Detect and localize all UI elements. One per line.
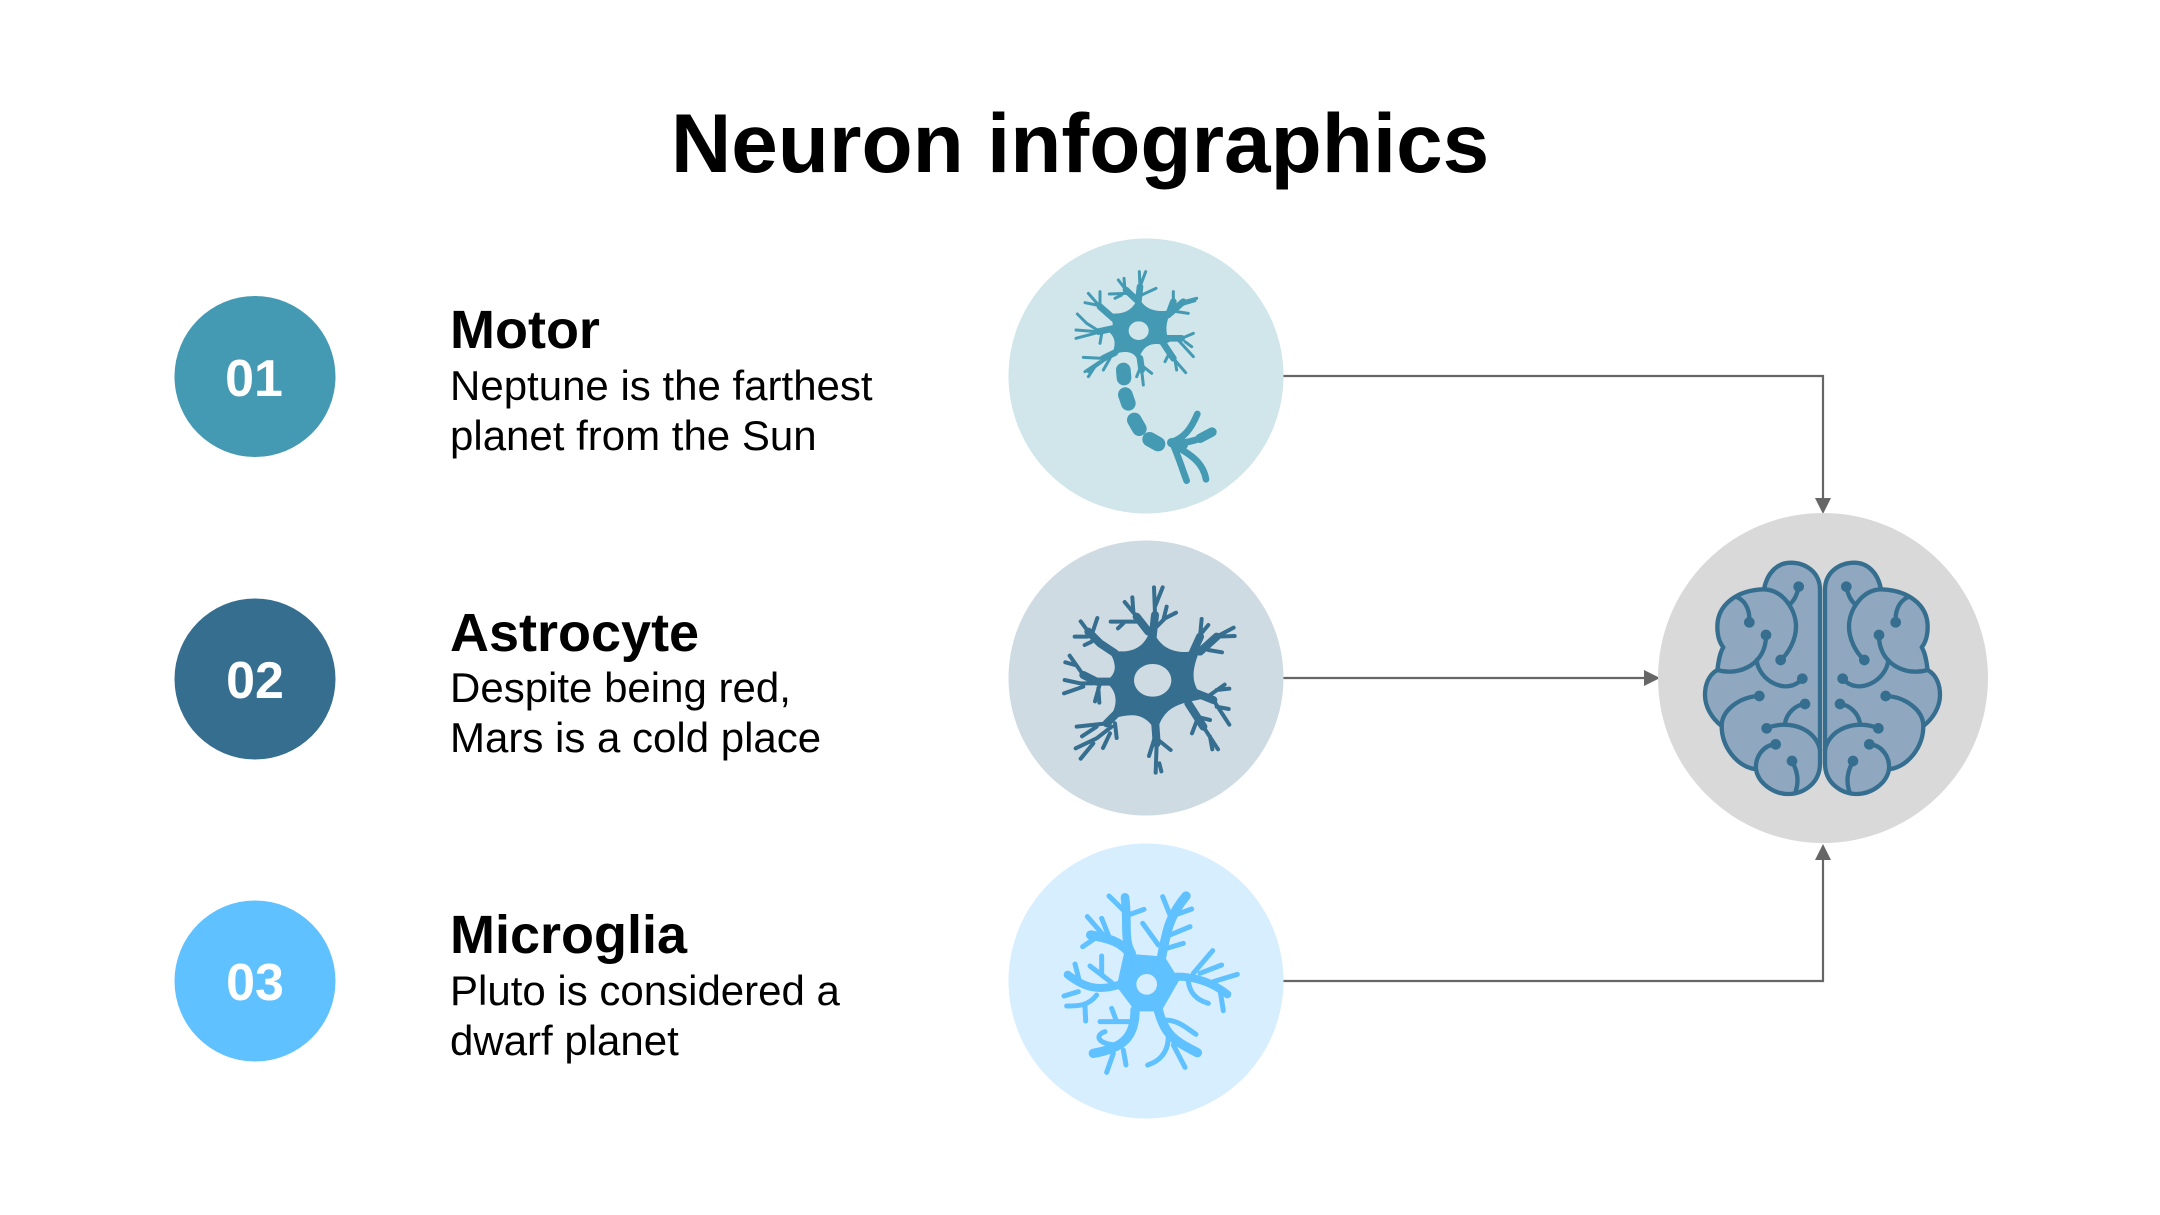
- number badge 01: 01: [225, 350, 283, 408]
- text block: Astrocyte: Despite being red,: [450, 664, 791, 711]
- icon: motor neuron: [1008, 238, 1284, 514]
- icon: astrocyte: [1008, 540, 1284, 816]
- number badge 02: [174, 598, 336, 760]
- brain left hemisphere: [1705, 563, 1820, 794]
- number badge 03: 03: [226, 954, 284, 1012]
- icon: microglia: [1008, 844, 1284, 1118]
- brain right hemisphere: [1825, 563, 1940, 794]
- text block: Microglia: [450, 905, 841, 1064]
- number badge 02: 02: [226, 652, 284, 710]
- text block: Astrocyte: Astrocyte: [450, 603, 699, 663]
- text block: Microglia: dwarf planet: [450, 1017, 679, 1064]
- text block: Motor: [450, 300, 873, 459]
- text block: Microglia: Pluto is considered a: [450, 967, 841, 1014]
- icon: brain: [1658, 513, 1988, 843]
- number badge 01: [174, 296, 336, 457]
- text block: Motor: Neptune is the farthest: [450, 362, 873, 409]
- connector: microglia to brain: [1283, 844, 1831, 981]
- number badge 03: [174, 900, 336, 1062]
- text block: Astrocyte: Mars is a cold place: [450, 714, 821, 761]
- title: Neuron infographics: [671, 96, 1489, 190]
- connector: astrocyte to brain: [1283, 670, 1660, 686]
- text block: Motor: Motor: [450, 300, 600, 360]
- text block: Microglia: Microglia: [450, 905, 688, 965]
- text block: Astrocyte: [450, 603, 821, 761]
- text block: Motor: planet from the Sun: [450, 412, 817, 459]
- connector: motor to brain: [1283, 376, 1831, 514]
